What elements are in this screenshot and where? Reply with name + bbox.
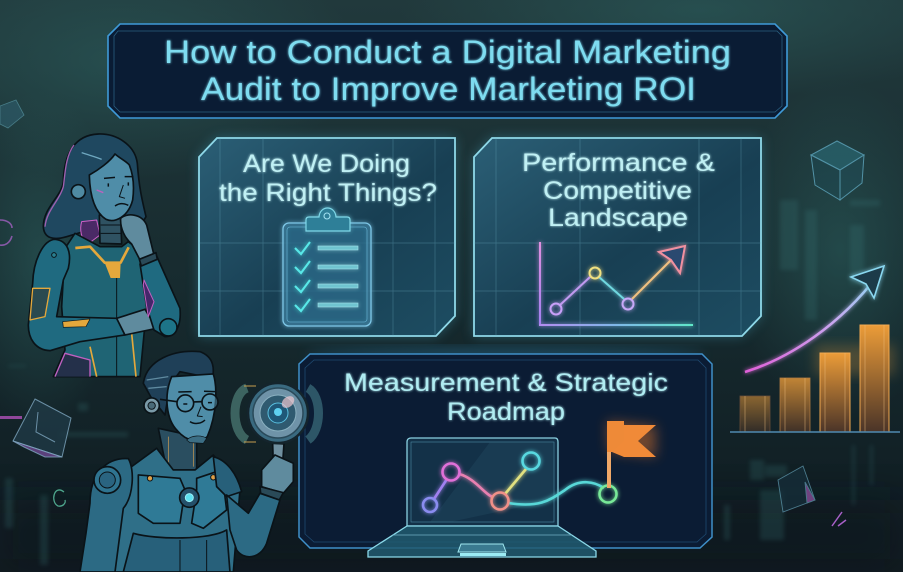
title text: How to Conduct a Digital Marketing [164, 34, 731, 70]
character: man with magnifying glass [80, 351, 293, 572]
decoration: cube left [13, 399, 71, 457]
character: thinking woman [28, 134, 180, 377]
hair back [43, 134, 146, 238]
heading [219, 150, 437, 207]
thinking hand [121, 215, 154, 260]
decoration: small ring [54, 490, 65, 506]
heading: the Right Things? [219, 179, 437, 207]
heading [522, 149, 715, 232]
torso [97, 448, 240, 572]
title panel [108, 24, 787, 118]
heading [344, 369, 668, 426]
icon: magnifying lens [235, 383, 318, 443]
neck [158, 428, 197, 470]
heading: Are We Doing [243, 150, 410, 178]
right arm [213, 457, 242, 497]
icon: orange flag [607, 421, 656, 488]
icon: clipboard checklist [283, 208, 371, 326]
left arm [28, 239, 125, 351]
roadmap curve [423, 452, 616, 512]
panel: performance and competitive landscape [474, 138, 761, 336]
left shoulder arm [80, 459, 132, 572]
decoration: small slashes [832, 512, 846, 526]
face [71, 185, 85, 199]
glasses [160, 394, 218, 412]
magnifier handle [273, 443, 284, 463]
decoration: cube upper right [811, 141, 864, 200]
heading: Landscape [548, 204, 688, 232]
heading: Performance & [522, 149, 715, 177]
decoration: neon line left [0, 416, 22, 419]
bar chart with rising arrow [730, 266, 900, 432]
decoration: floating cube top left [0, 100, 24, 128]
title text: Audit to Improve Marketing ROI [201, 71, 696, 107]
torso [53, 233, 147, 377]
panel: are we doing the right things [199, 138, 455, 336]
gold collar [75, 247, 129, 263]
neck [99, 215, 122, 244]
decoration: purple ring left [0, 220, 12, 245]
forearm hand [117, 309, 157, 335]
panel: measurement and strategic roadmap [299, 348, 712, 557]
face [167, 374, 216, 441]
hand [262, 455, 293, 493]
line chart with arrow [539, 242, 693, 326]
decoration: cube lower right [778, 466, 815, 512]
heading: Roadmap [447, 398, 565, 426]
title text [164, 34, 731, 107]
right arm [140, 256, 180, 337]
head hair [143, 351, 213, 415]
heading: Measurement & Strategic [344, 369, 668, 397]
icon: laptop [368, 438, 596, 557]
heading: Competitive [543, 177, 692, 205]
